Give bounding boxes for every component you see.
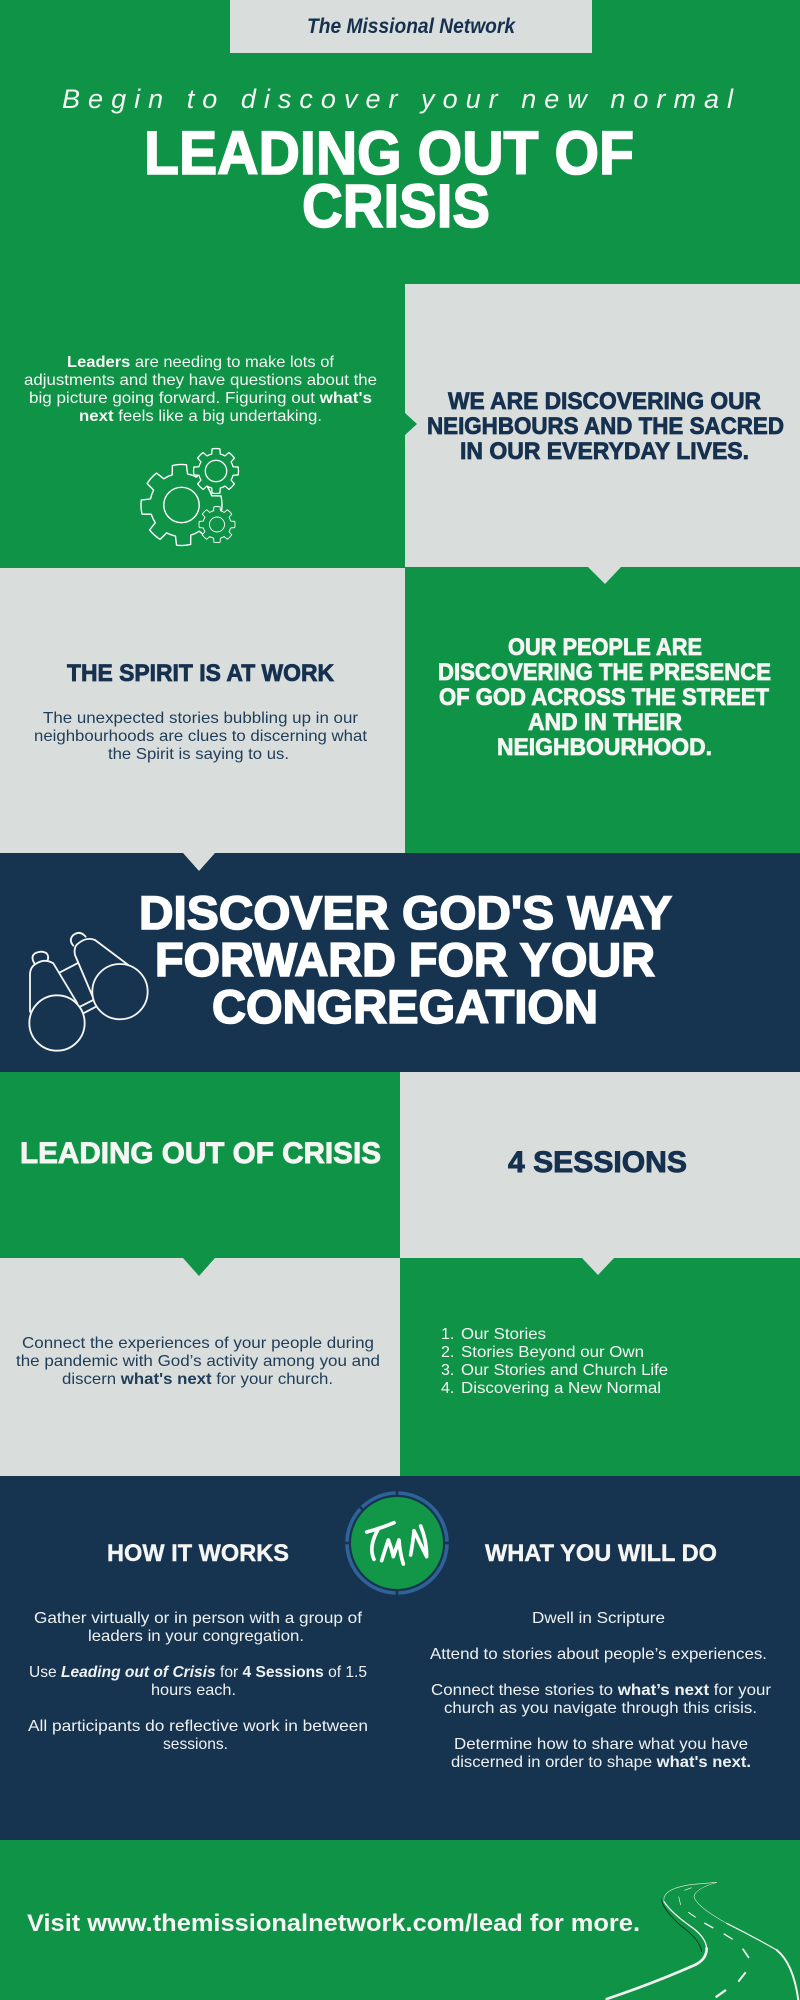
heading: our people: NEIGHBOURHOOD. bbox=[497, 734, 712, 761]
list: four sessions: 2. bbox=[441, 1344, 454, 1361]
title: LEADING OUT OF bbox=[144, 119, 634, 187]
heading: leading out of crisis: LEADING OUT OF CRISIS bbox=[20, 1137, 381, 1170]
heading: discover god's way bbox=[139, 886, 672, 1033]
organisation name tab: The Missional Network bbox=[307, 15, 516, 38]
text block: connect the experiences: the pandemic with God’s activity among you and bbox=[16, 1353, 380, 1370]
icon: binoculars bbox=[29, 933, 148, 1051]
heading: our people: OF GOD ACROSS THE STREET bbox=[439, 684, 769, 711]
text block: what you will do: church as you navigate through this crisis. bbox=[444, 1700, 757, 1717]
arrow: pointing down bbox=[582, 1258, 614, 1275]
text block: what you will do: discerned in order to shape what's next. bbox=[451, 1754, 751, 1771]
panel: leading out of crisis bbox=[0, 1072, 400, 1258]
heading: what you will do: WHAT YOU WILL DO bbox=[485, 1540, 717, 1567]
text block: how it works: Use Leading out of Crisis for 4 Sessions of 1.5 bbox=[29, 1664, 367, 1681]
panel: our people are discovering bbox=[405, 567, 800, 853]
icon: TMN logo bbox=[344, 1490, 450, 1596]
panel: leaders intro bbox=[0, 284, 405, 568]
text block: connect the experiences bbox=[16, 1335, 380, 1388]
text block: how it works: hours each. bbox=[151, 1682, 236, 1699]
organisation name tab bbox=[230, 0, 592, 53]
panel: 4 sessions bbox=[400, 1072, 800, 1258]
list: four sessions: Discovering a New Normal bbox=[461, 1380, 661, 1397]
text block: what you will do: Connect these stories to what’s next for your bbox=[431, 1682, 772, 1699]
arrow: pointing down bbox=[588, 567, 621, 584]
icon: winding road bbox=[607, 1882, 798, 2000]
heading: our people: DISCOVERING THE PRESENCE bbox=[438, 659, 771, 686]
heading: discovering our neighbours: NEIGHBOURS AND THE SACRED bbox=[427, 413, 784, 440]
text block: what you will do bbox=[430, 1610, 772, 1771]
heading: 4 sessions: 4 SESSIONS bbox=[508, 1146, 687, 1179]
list: four sessions: 1. bbox=[441, 1326, 454, 1343]
heading: our people: OUR PEOPLE ARE bbox=[508, 634, 702, 661]
text block: leaders bbox=[24, 354, 377, 425]
heading: discover god's way: DISCOVER GOD'S WAY bbox=[139, 886, 672, 939]
panel: header bbox=[62, 0, 734, 240]
text block: the spirit bbox=[34, 710, 368, 763]
heading: discovering our neighbours: IN OUR EVERYDAY LIVES. bbox=[460, 438, 749, 465]
text block: what you will do: Determine how to share what you have bbox=[454, 1736, 748, 1753]
text block: connect the experiences: Connect the experiences of your people during bbox=[22, 1335, 374, 1352]
arrow: pointing down bbox=[183, 1258, 215, 1276]
tagline: Begin to discover your new normal bbox=[62, 84, 734, 114]
arrow: pointing down bbox=[183, 853, 215, 871]
arrow: pointing right bbox=[405, 413, 417, 435]
text block: leaders: Leaders are needing to make lots of bbox=[67, 354, 335, 371]
text block: connect the experiences: discern what's next for your church. bbox=[62, 1371, 333, 1388]
list: four sessions: Stories Beyond our Own bbox=[461, 1344, 644, 1361]
text block: what you will do: Attend to stories about people’s experiences. bbox=[430, 1646, 767, 1663]
list: four sessions: 3. bbox=[441, 1362, 454, 1379]
heading: the spirit is at work: THE SPIRIT IS AT WORK bbox=[67, 660, 335, 687]
text block: what you will do: Dwell in Scripture bbox=[532, 1610, 665, 1627]
list: four sessions: Our Stories and Church Life bbox=[461, 1362, 668, 1379]
text block: how it works: Gather virtually or in person with a group of bbox=[34, 1610, 363, 1627]
heading: discovering our neighbours: WE ARE DISCOVERING OUR bbox=[448, 388, 761, 415]
panel: discover god's way forward bbox=[0, 853, 800, 1072]
text block: the spirit: the Spirit is saying to us. bbox=[108, 746, 289, 763]
panel: connect the experiences bbox=[0, 1258, 400, 1476]
heading: our people: AND IN THEIR bbox=[528, 709, 682, 736]
panel: session list bbox=[400, 1258, 800, 1476]
icon: gears bbox=[139, 448, 239, 548]
panel: how it works and what you will do bbox=[0, 1476, 800, 1840]
text block: how it works: leaders in your congregation. bbox=[88, 1628, 304, 1645]
heading: our people bbox=[438, 634, 771, 761]
text block: how it works: All participants do reflective work in between bbox=[28, 1718, 368, 1735]
panel: footer call to action bbox=[0, 1840, 800, 2000]
text: website link: Visit www.themissionalnetwork.com/lead for more. bbox=[27, 1910, 640, 1937]
title: CRISIS bbox=[302, 172, 490, 240]
list: four sessions: 4. bbox=[441, 1380, 454, 1397]
text block: the spirit: The unexpected stories bubbling up in our bbox=[43, 710, 359, 727]
panel: the spirit is at work bbox=[0, 568, 405, 853]
panel: discovering our neighbours bbox=[405, 284, 800, 567]
heading: discover god's way: FORWARD FOR YOUR bbox=[155, 933, 655, 986]
list: four sessions bbox=[441, 1326, 668, 1397]
title bbox=[144, 119, 634, 240]
text block: leaders: adjustments and they have questions about the bbox=[24, 372, 377, 389]
text block: how it works: sessions. bbox=[163, 1736, 228, 1753]
heading: discover god's way: CONGREGATION bbox=[212, 980, 598, 1033]
text block: leaders: next feels like a big undertaking. bbox=[79, 408, 322, 425]
heading: discovering our neighbours bbox=[427, 388, 784, 465]
heading: how it works: HOW IT WORKS bbox=[107, 1540, 289, 1567]
text block: the spirit: neighbourhoods are clues to discerning what bbox=[34, 728, 368, 745]
text block: leaders: big picture going forward. Figuring out what's bbox=[29, 390, 372, 407]
list: four sessions: Our Stories bbox=[461, 1326, 546, 1343]
text block: how it works bbox=[28, 1610, 368, 1753]
